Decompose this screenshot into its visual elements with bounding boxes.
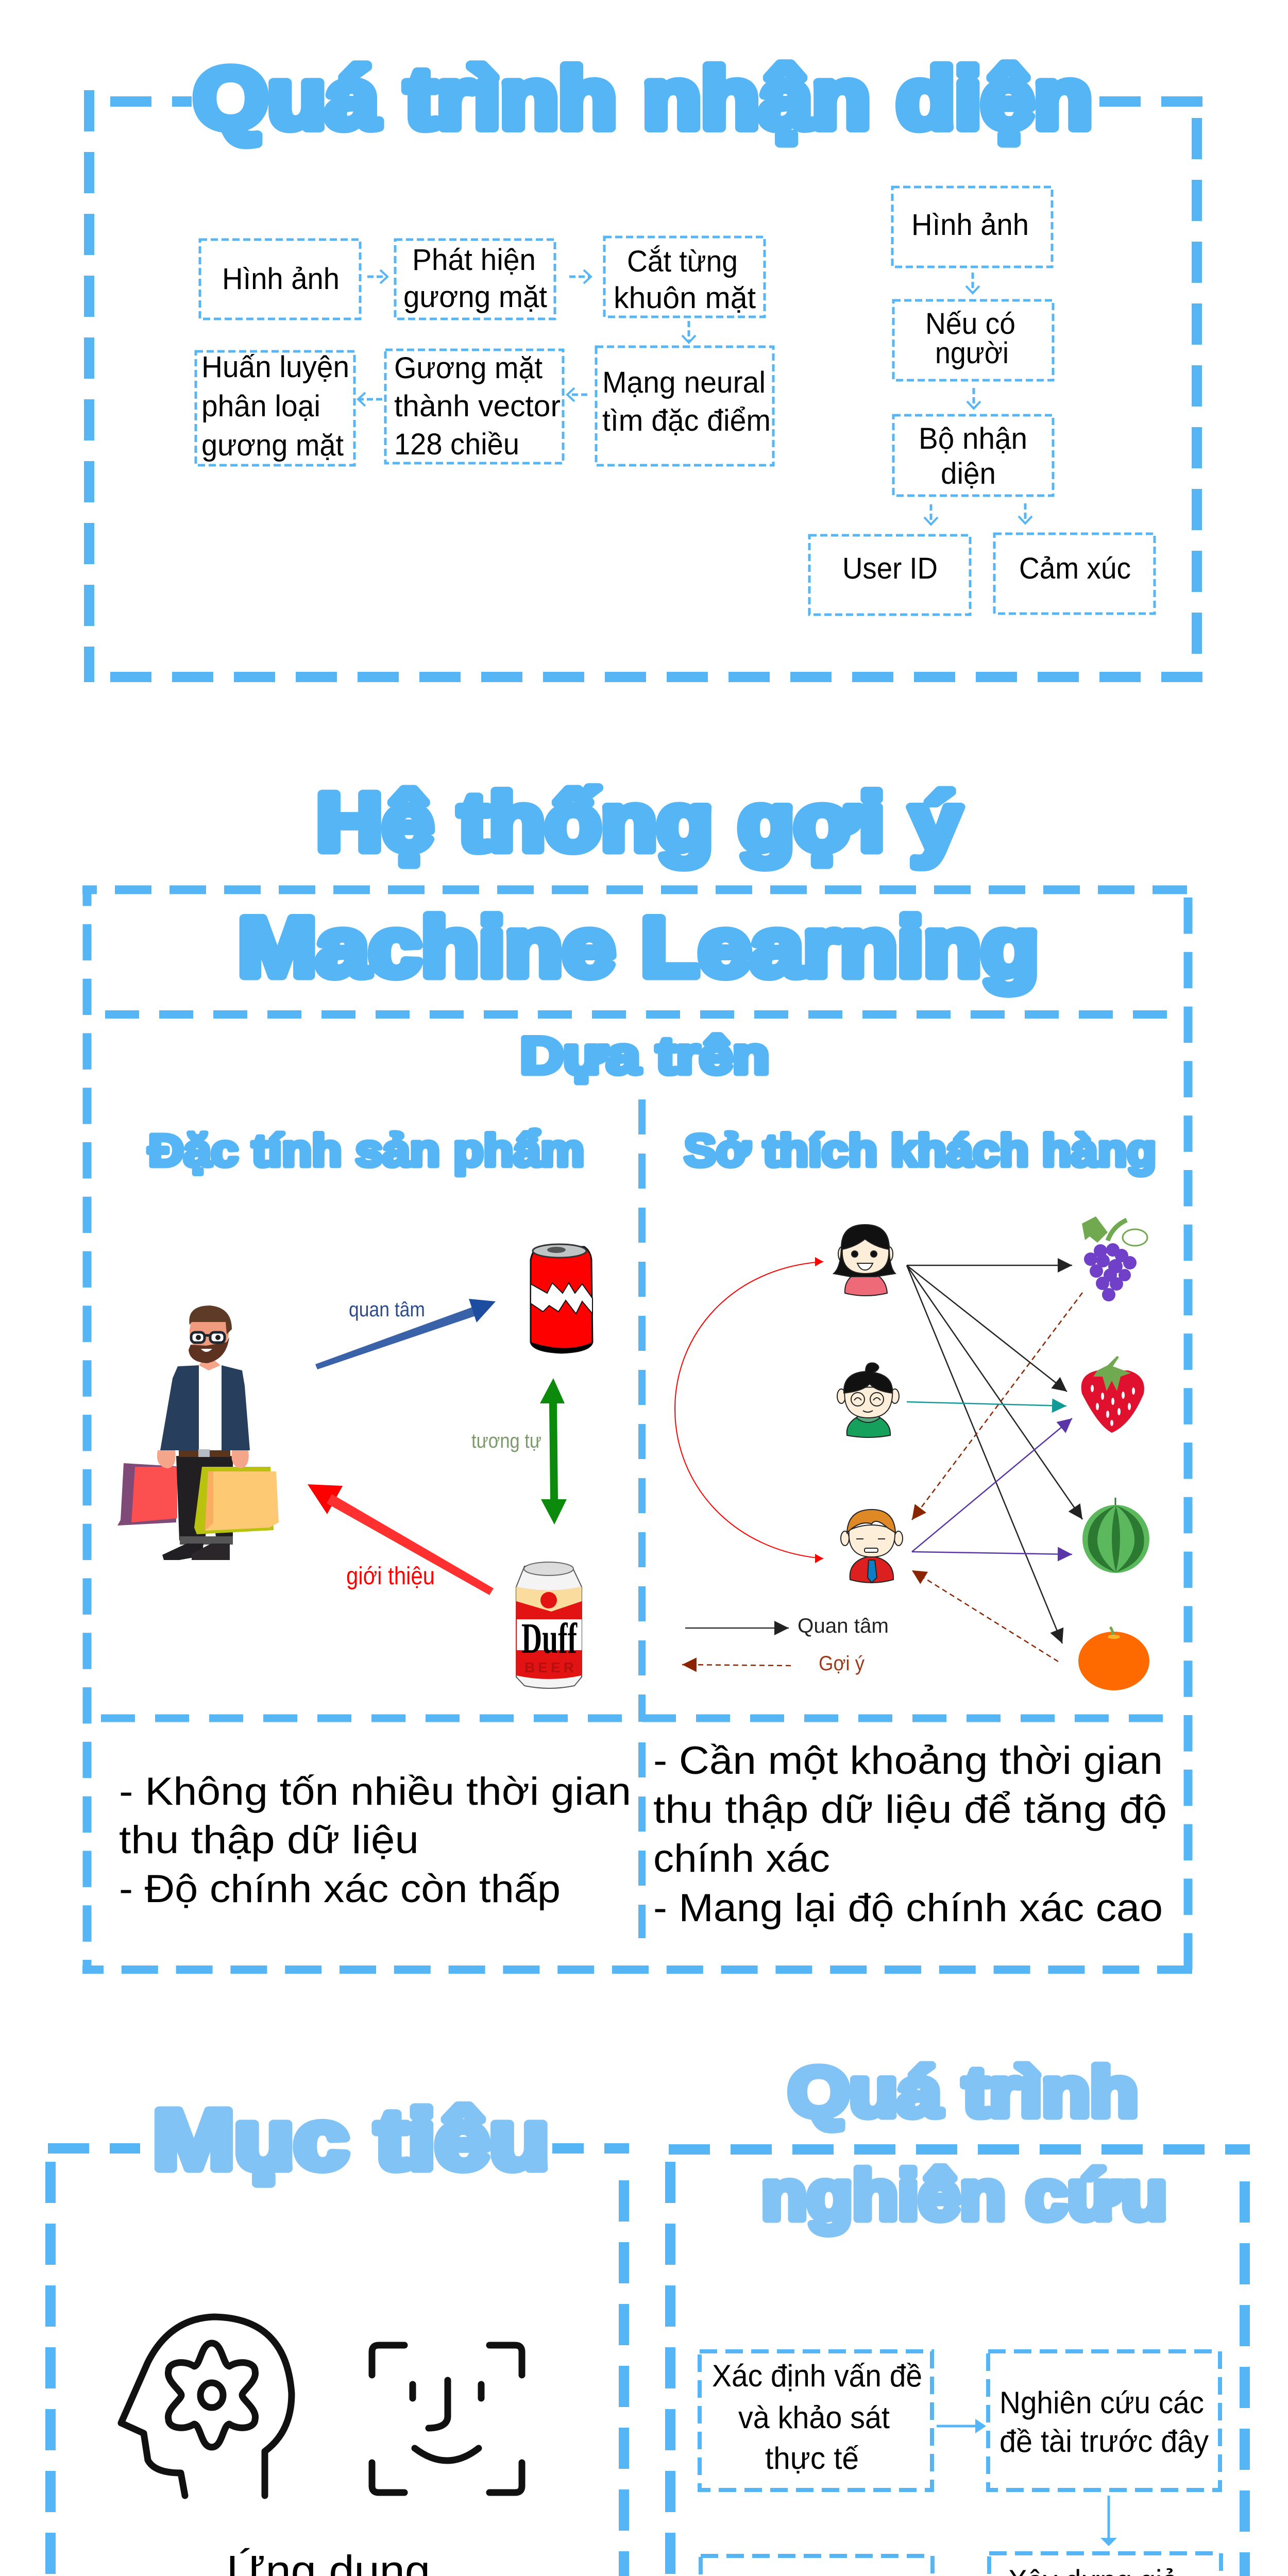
icon: watermelon [1082,1498,1149,1573]
heading: machine learning: Machine Learning [238,901,1039,994]
title: recognition process: Quá trình nhận diện [194,51,1092,146]
flow: training pipeline: 128 chiều [394,428,519,461]
icon: head with gear [121,2317,292,2496]
icon: strawberry [1081,1356,1144,1433]
legend: Quan tâm [798,1615,889,1637]
flow: training pipeline: Cắt từng [627,245,738,278]
text: collaborative pros and cons: - Mang lại độ chính xác cao [653,1886,1163,1930]
arrow: recommend [308,1484,494,1595]
flow: training pipeline: Huấn luyện [201,350,349,384]
text: collaborative pros and cons: chính xác [653,1837,830,1880]
flow: recognition pipeline: Hình ảnh [911,208,1029,242]
icon: duff beer can: Duff [521,1615,578,1663]
flow: recognition pipeline: Cảm xúc [1019,552,1131,585]
text: collaborative pros and cons [653,1739,1167,1930]
flow: training pipeline: phân loại [201,389,320,423]
icon: person glasses [837,1363,899,1437]
flow: recognition pipeline: Bộ nhận [919,422,1027,455]
flow: training pipeline: khuôn mặt [614,281,756,315]
flow: step boxes [700,2351,1223,2576]
heading: recommender system: Hệ thống gợi ý [316,777,961,868]
title: research process: Quá trình [788,2053,1138,2131]
icon: red soda can [531,1244,592,1353]
text: content-based pros and cons: - Độ chính xác còn thấp [119,1867,561,1911]
icon: person woman [834,1225,895,1296]
text: collaborative pros and cons: thu thập dữ liệu để tăng độ [653,1788,1167,1832]
icon: duff beer can [516,1562,582,1688]
title: goals: Mục tiêu [153,2092,549,2187]
icon: duff beer can: BEER [524,1659,574,1675]
heading: customer preferences: Sở thích khách hàng [684,1126,1156,1176]
flow: recognition pipeline: User ID [842,552,938,585]
flow: training pipeline: gương mặt [403,280,547,314]
flow: recognition pipeline: diện [941,457,996,490]
icon: orange [1078,1627,1149,1690]
legend: Gợi ý [819,1652,865,1675]
panel: machine learning recommender [82,886,1192,1974]
flow: training pipeline: Hình ảnh [222,262,340,296]
arrow: recommend: giới thiệu [346,1563,435,1590]
panel: research process [665,2053,1250,2576]
arrow: similar [471,1378,567,1524]
arrows: process flow [358,270,1032,524]
title: research process [761,2053,1167,2234]
flow: recognition pipeline: Nếu có [925,307,1015,341]
flow: training pipeline: Mạng neural [602,366,766,399]
flow: training pipeline: Gương mặt [394,351,543,385]
legend [682,1615,889,1675]
text: content-based pros and cons [119,1770,631,1911]
heading: product features: Đặc tính sản phẩm [148,1126,584,1176]
title: research process: nghiên cứu [761,2156,1167,2234]
flow: training pipeline: gương mặt [201,429,344,462]
flow: training pipeline: thành vector [394,389,561,423]
arrow: similar: tương tự [471,1430,541,1452]
arrows: user preference graph [675,1257,1082,1662]
arrow: interest [315,1298,496,1369]
text: content-based pros and cons: - Không tốn nhiều thời gian [119,1770,631,1814]
flow: training pipeline: Phát hiện [412,243,536,277]
panel: face recognition process [0,51,1202,682]
icon: person tie [841,1510,903,1583]
text: content-based pros and cons: thu thập dữ liệu [119,1818,419,1862]
flow: step boxes: và khảo sát [738,2400,890,2435]
flow: recognition pipeline: người [935,336,1009,370]
flow: training pipeline [196,237,773,465]
arrow: interest: quan tâm [349,1298,425,1321]
icon: face id [372,2345,522,2493]
icon: grapes [1082,1216,1147,1301]
icon: shopper with bags [117,1306,279,1560]
panel: goals [45,2092,629,2576]
flow: recognition pipeline [809,187,1155,615]
flow: step boxes: Xác định vấn đề [712,2359,922,2393]
flow: step boxes: đề tài trước đây [999,2424,1209,2459]
arrows: research flow [809,2419,1120,2576]
text: collaborative pros and cons: - Cần một khoảng thời gian [653,1739,1163,1783]
flow: step boxes: thực tế [765,2441,859,2476]
heading: based on: Dựa trên [520,1027,769,1084]
flow: step boxes: Nghiên cứu các [999,2385,1204,2420]
flow: training pipeline: tìm đặc điểm [602,404,771,437]
